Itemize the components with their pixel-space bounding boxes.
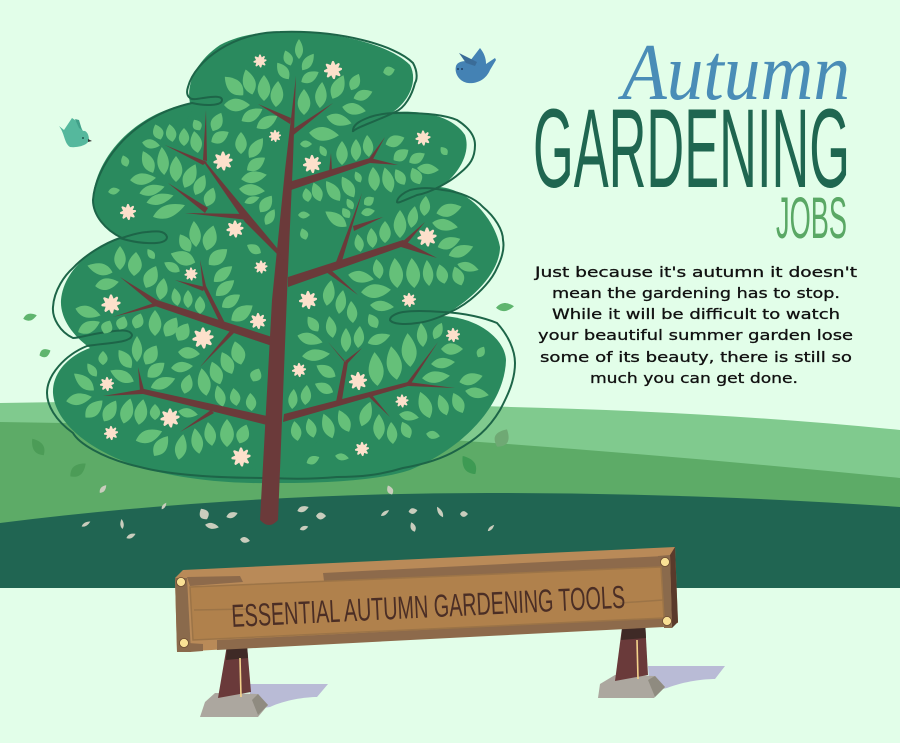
sign wood stripes [187, 576, 243, 586]
sign board [175, 547, 678, 652]
title word: Autumn: Autumn [617, 29, 850, 117]
title [533, 29, 850, 251]
intro text: much you can get done. [590, 371, 798, 387]
sign panel [190, 567, 664, 640]
flowers [101, 55, 459, 465]
intro text: your beautiful summer garden lose [538, 328, 853, 344]
icon: blue bird [456, 48, 496, 83]
intro text: some of its beauty, there is still so [540, 350, 852, 366]
sign heading: ESSENTIAL AUTUMN GARDENING TOOLS [231, 579, 626, 634]
sign bolts [176, 558, 672, 648]
fallen petals [81, 484, 495, 544]
intro text: Just because it's autumn it doesn't [534, 265, 857, 281]
tree trunk and branches [103, 76, 455, 525]
intro text: mean the gardening has to stop. [552, 286, 840, 302]
icon: green bird [59, 118, 92, 147]
crown outline [47, 32, 515, 479]
intro text: While it will be difficult to watch [552, 307, 840, 323]
leaves [65, 39, 490, 467]
intro text [534, 265, 857, 387]
sign left leg [200, 645, 328, 717]
hills [0, 401, 900, 588]
sign right leg [598, 620, 725, 698]
tree crown [47, 32, 515, 483]
falling leaves [22, 302, 514, 480]
